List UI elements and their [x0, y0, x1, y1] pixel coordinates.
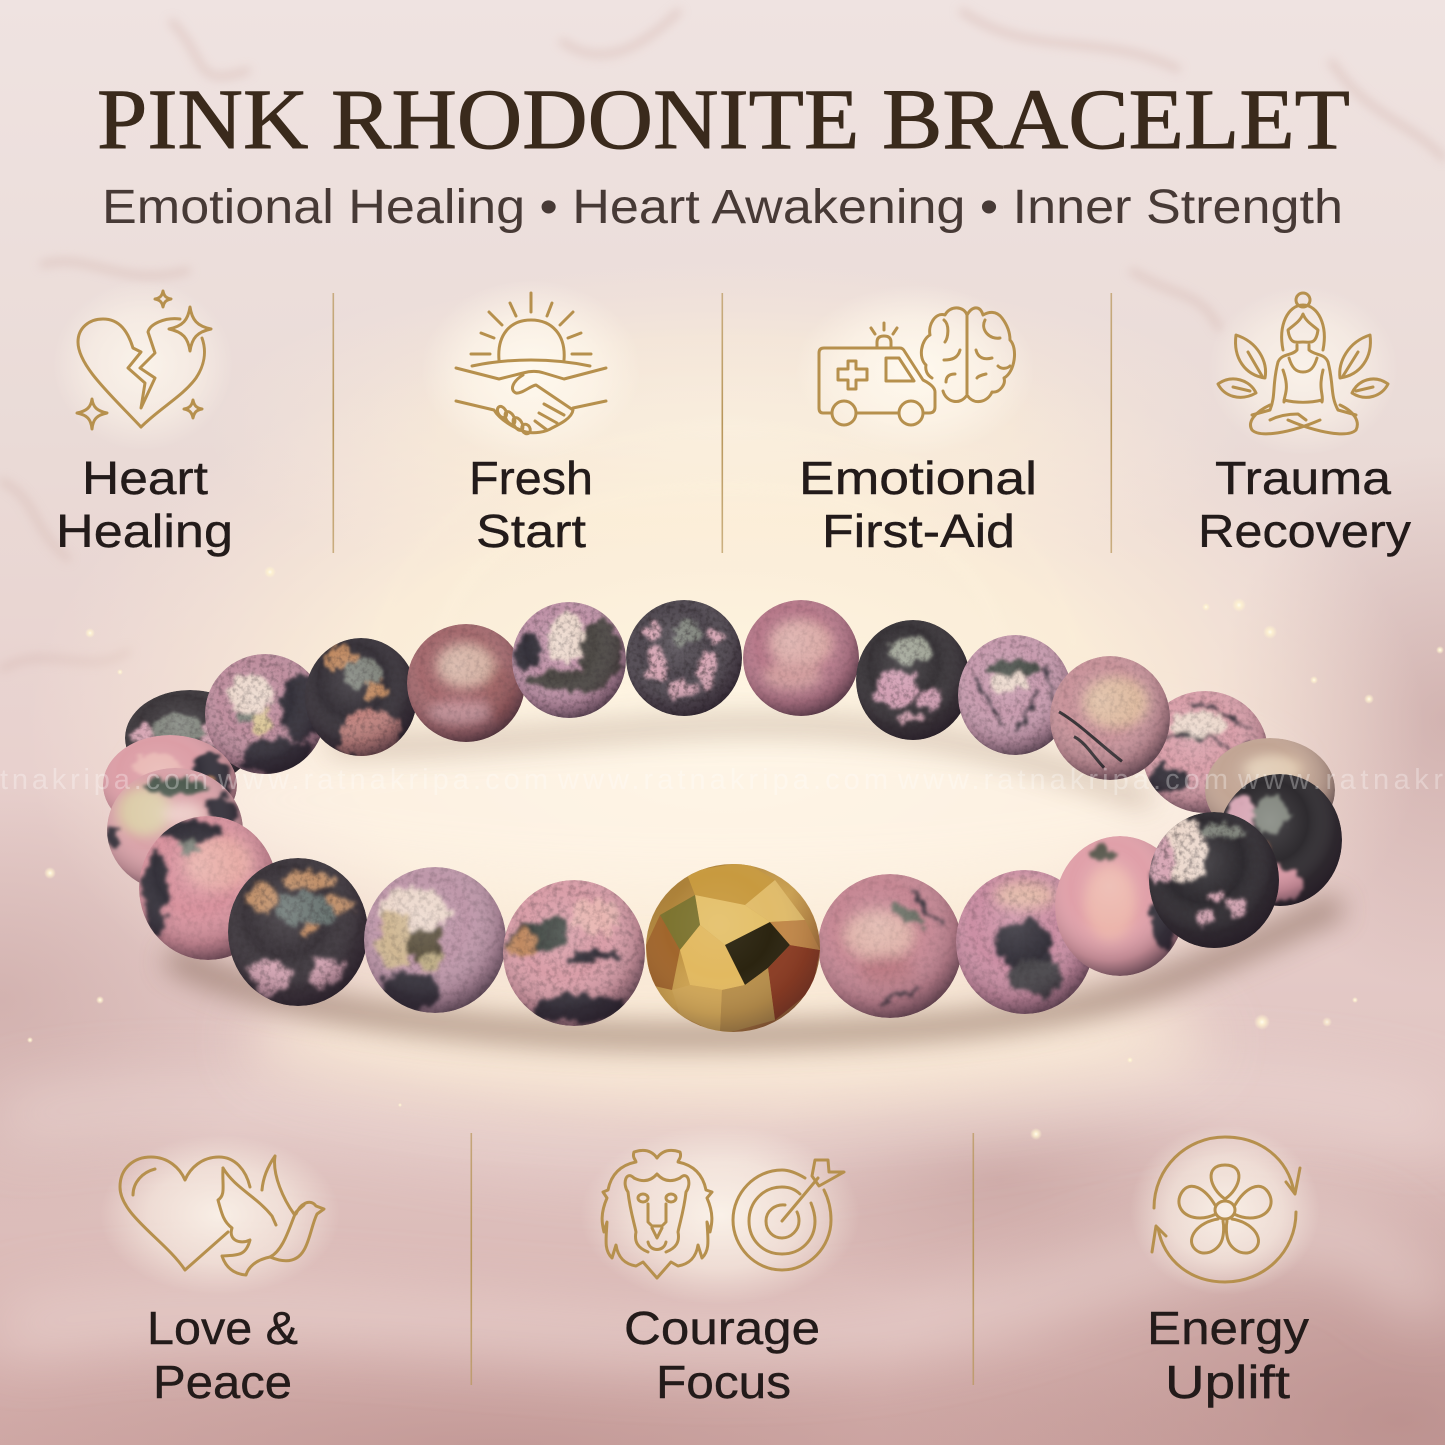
bead 19 [503, 880, 645, 1026]
label: love and peace: Peace [153, 1356, 292, 1408]
bead 24 [1149, 812, 1279, 948]
title: PINK RHODONITE BRACELET [97, 71, 1350, 167]
icon: target with arrow [733, 1160, 844, 1270]
bead 6 [626, 600, 742, 716]
bead 10 [1050, 656, 1170, 780]
bead 18 [364, 867, 506, 1013]
bead 7 [743, 600, 859, 716]
bead 17 [228, 858, 368, 1006]
bead 14 [103, 735, 237, 809]
benefit: energy uplift [1147, 1137, 1309, 1408]
label: emotional first-aid: First-Aid [822, 505, 1015, 557]
bead 9 [958, 635, 1072, 755]
subtitle: Emotional Healing • Heart Awakening • Inner Strength [102, 181, 1343, 234]
benefit: fresh start [456, 293, 606, 557]
bead 8 [856, 620, 970, 740]
benefit: trauma recovery [1198, 293, 1411, 557]
bead 16 [139, 816, 277, 960]
bead 23 [1055, 836, 1185, 976]
bead 22 [956, 870, 1094, 1014]
bead 1 [125, 690, 240, 773]
benefit: heart healing [56, 291, 233, 557]
watermark: www.ratnakripa.com [217, 764, 548, 796]
icon: sunrise and handshake [456, 293, 606, 435]
watermark: www.ratnakripa.com [897, 764, 1228, 796]
icon: lion head [602, 1150, 712, 1278]
label: heart healing: Heart [82, 452, 208, 504]
top row dividers [332, 293, 1112, 553]
watermark: www.ratnakripa.com [557, 764, 888, 796]
label: love and peace: Love & [147, 1302, 298, 1354]
label: courage and focus [624, 1302, 820, 1408]
benefit: courage and focus [602, 1150, 844, 1408]
watermark: tnakripa.com [0, 764, 208, 796]
label: courage and focus: Courage [624, 1302, 820, 1354]
label: love and peace [147, 1302, 298, 1408]
bead 15 [107, 768, 243, 892]
icon: ambulance and brain [819, 308, 1015, 425]
bead 11 [1142, 691, 1268, 813]
watermark: www.ratnakr [1237, 764, 1443, 796]
label: energy uplift: Energy [1147, 1302, 1309, 1354]
bead 13 [1218, 774, 1342, 906]
label: energy uplift [1147, 1302, 1309, 1408]
label: emotional first-aid: Emotional [799, 452, 1037, 504]
icon: broken heart with sparkles [77, 291, 211, 429]
benefit: emotional first-aid [799, 308, 1037, 557]
icon: flower in circular arrows [1152, 1137, 1300, 1282]
bead 12 [1205, 738, 1335, 813]
label: fresh start: Start [476, 505, 586, 557]
label: heart healing [56, 452, 233, 557]
bead 2 [205, 654, 325, 774]
label: energy uplift: Uplift [1165, 1356, 1290, 1408]
bead 3 [305, 638, 417, 762]
bracelet [103, 600, 1342, 1035]
icon: heart and dove [120, 1156, 324, 1275]
label: fresh start [469, 452, 593, 557]
label: trauma recovery [1198, 452, 1411, 557]
icon: meditating woman with leaves [1218, 293, 1388, 434]
label: courage and focus: Focus [656, 1356, 791, 1408]
bead 21 [818, 874, 962, 1018]
label: trauma recovery: Recovery [1198, 505, 1411, 557]
gold faceted bead [646, 862, 820, 1035]
label: heart healing: Healing [56, 505, 233, 557]
label: trauma recovery: Trauma [1215, 452, 1391, 504]
bottom row dividers [470, 1133, 974, 1385]
watermark [0, 764, 1443, 796]
sparkles [27, 566, 1444, 1140]
bracelet shadows [170, 724, 1340, 1036]
label: fresh start: Fresh [469, 452, 593, 504]
bead 5 [512, 602, 626, 718]
icon glows [53, 280, 1398, 1305]
bead 4 [407, 624, 525, 742]
label: emotional first-aid [799, 452, 1037, 557]
benefit: love and peace [120, 1156, 324, 1408]
